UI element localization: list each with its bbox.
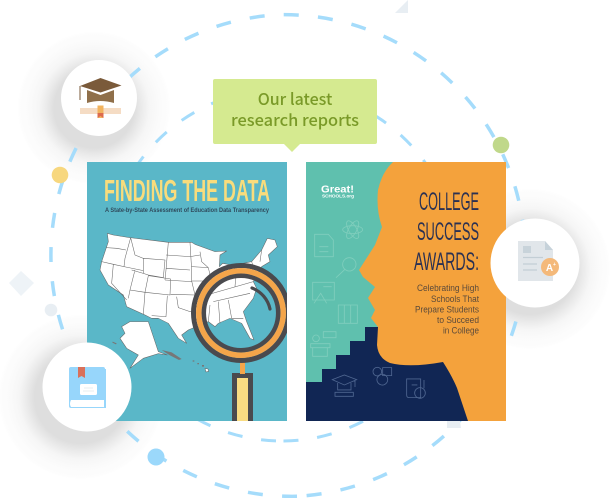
- Great Schools logo: Great!: [321, 184, 354, 196]
- Great Schools logo: SCHOOLS.org: [322, 194, 354, 198]
- decorative shapes: [9, 0, 509, 466]
- teal background of profile: [306, 162, 393, 382]
- cover title: SUCCESS: [417, 218, 479, 246]
- cover subtitle: in College: [443, 326, 479, 336]
- icons on teal: [311, 219, 363, 356]
- icon: document with A+ grade: [518, 241, 559, 281]
- badge: book: [42, 342, 132, 432]
- inner dashed orbit: [106, 89, 458, 441]
- icon: book: [69, 367, 106, 408]
- outer dashed orbit: [51, 15, 525, 496]
- cover subtitle: to Succeed: [437, 315, 479, 325]
- cover subtitle: Celebrating High: [417, 283, 479, 293]
- cover title: COLLEGE: [419, 188, 479, 216]
- US map: [100, 233, 277, 372]
- cover subtitle: Schools That: [431, 294, 480, 304]
- icon: graduation cap and diploma: [80, 78, 122, 118]
- report cover: Finding the Data: [87, 162, 288, 421]
- cover title: [414, 188, 479, 276]
- icon: document with A+ grade: A: [546, 263, 553, 274]
- cover subtitle: Prepare Students: [415, 304, 480, 314]
- navy stairs and neck: [306, 327, 468, 421]
- callout: our latest research reports: research reports: [231, 107, 359, 131]
- icons on navy: [332, 367, 425, 398]
- badge: graded document: [490, 218, 580, 308]
- cover subtitle: [415, 283, 480, 336]
- cover title: FINDING THE DATA: [104, 174, 270, 208]
- icon: document with A+ grade: +: [553, 262, 556, 268]
- callout: our latest research reports: [213, 79, 377, 152]
- badge: graduation cap: [61, 60, 137, 136]
- callout: our latest research reports: Our latest: [258, 86, 333, 110]
- magnifying glass: [194, 266, 288, 421]
- cover title: AWARDS:: [414, 248, 479, 276]
- report cover: College Success Awards: [306, 162, 506, 421]
- cover subtitle: A State-by-State Assessment of Education Data Transparency: [105, 208, 270, 214]
